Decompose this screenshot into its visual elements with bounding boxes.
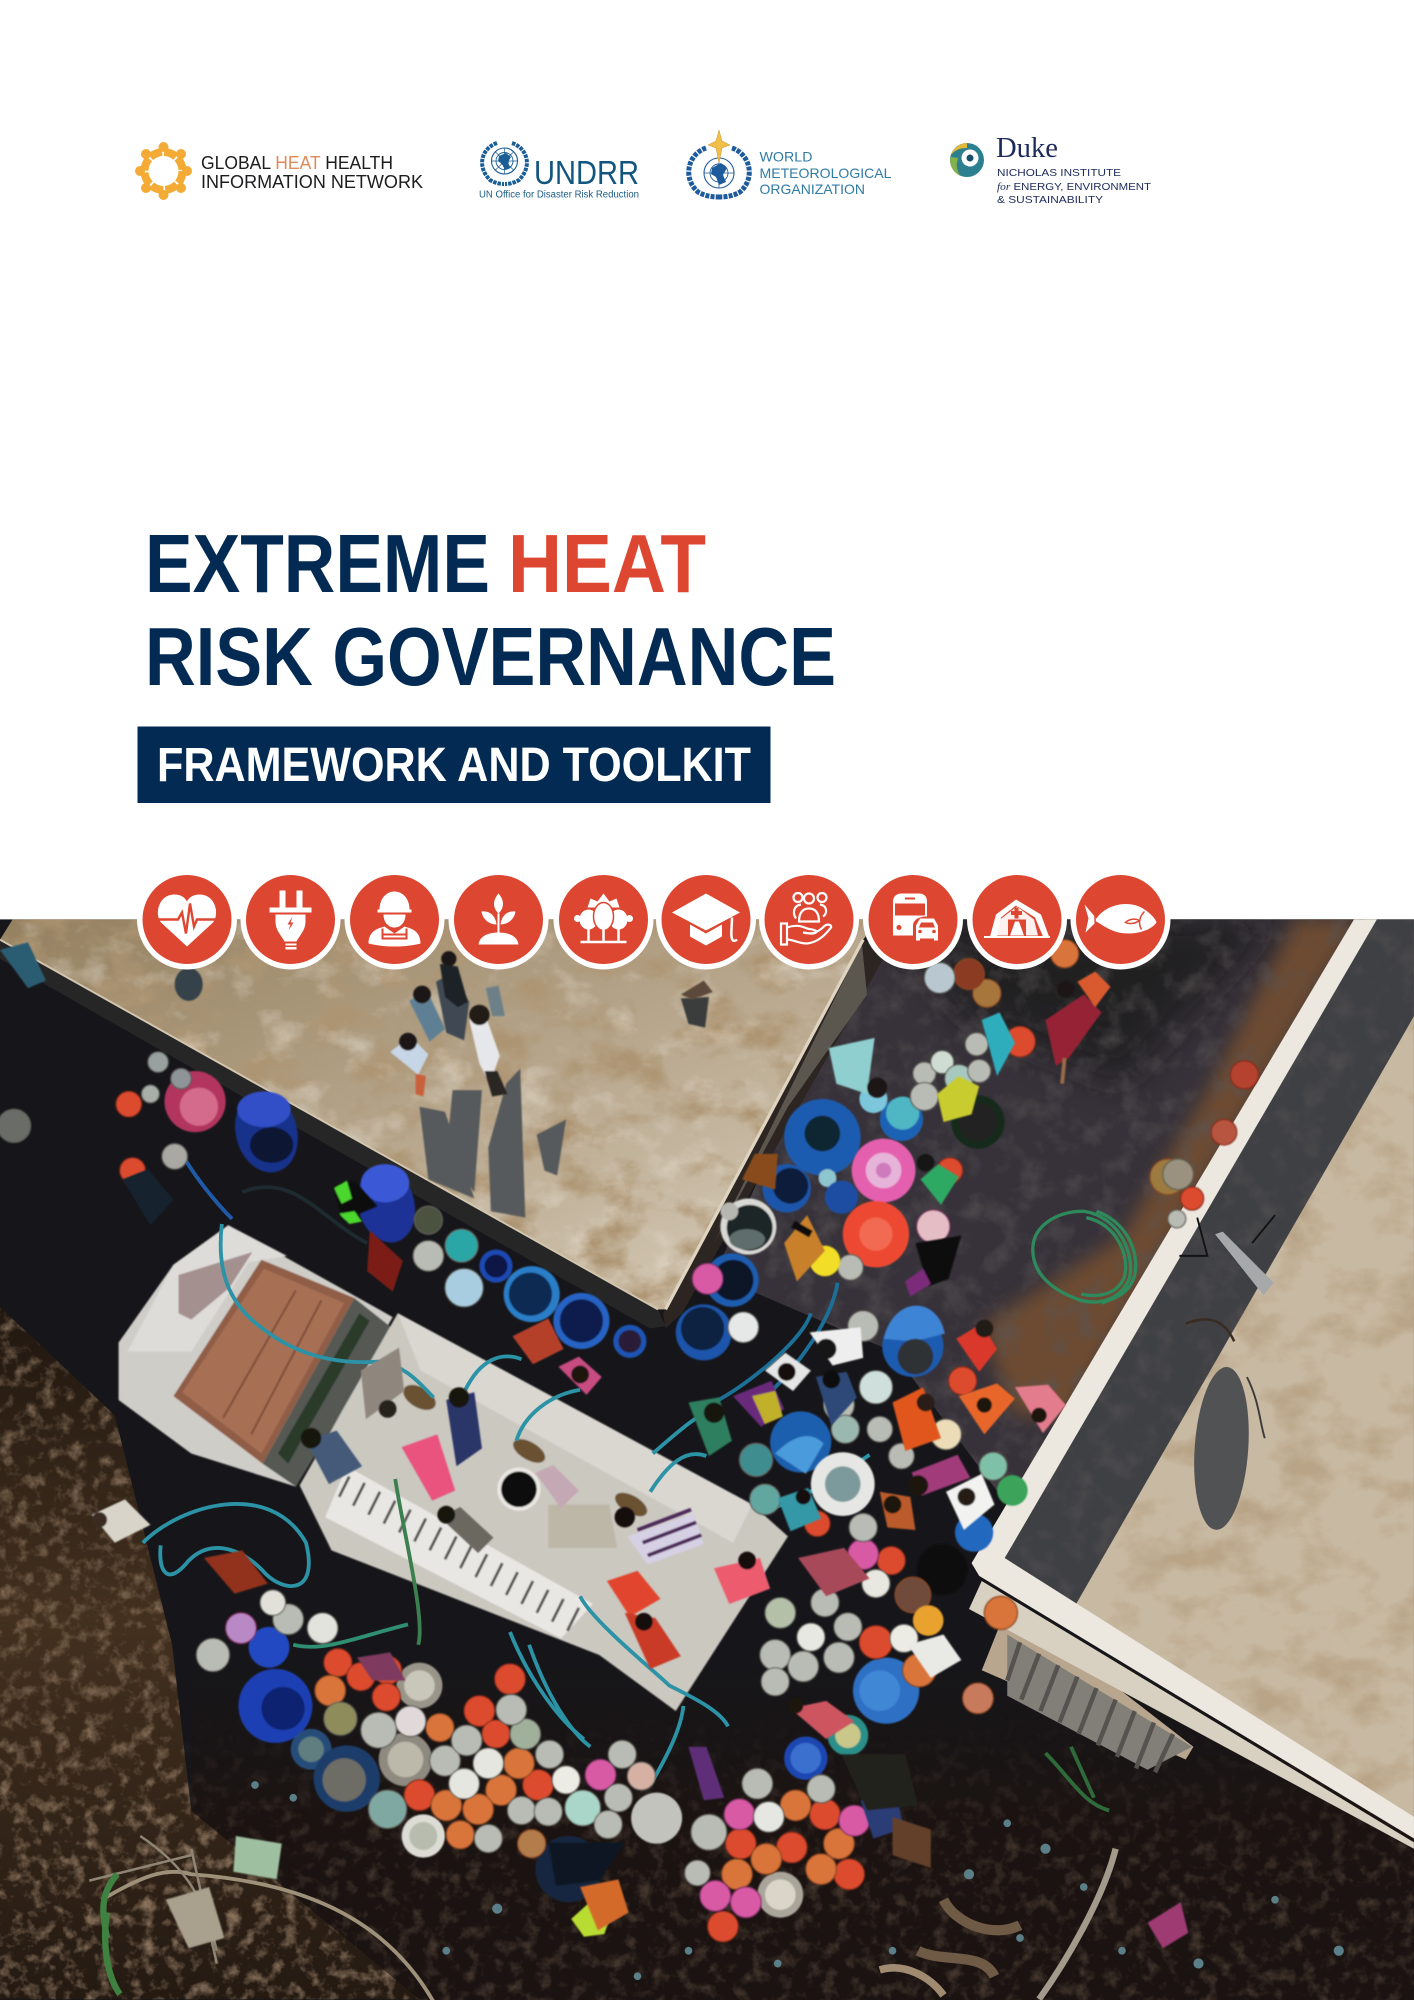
icon: plant sprout	[448, 870, 548, 970]
large coloured basins	[164, 1071, 1005, 1918]
blue barrels and tubs	[226, 1085, 993, 1902]
red and orange pots	[116, 1026, 1258, 1942]
icon: energy plug	[240, 870, 340, 970]
subtitle banner: FRAMEWORK AND TOOLKIT	[157, 738, 751, 792]
logo: World Meteorological Organization	[689, 130, 892, 197]
logo: World Meteorological Organization: METEOROLOGICAL	[760, 165, 892, 181]
logo: Duke Nicholas Institute: for ENERGY, ENVIRONMENT	[997, 181, 1152, 193]
logo: UNDRR: UN Office for Disaster Risk Reduction	[479, 190, 639, 200]
icon: medical tent	[967, 870, 1067, 970]
yellow and green containers	[571, 1076, 1028, 1937]
logo: Duke Nicholas Institute: NICHOLAS INSTITUTE	[997, 167, 1121, 179]
title	[145, 517, 836, 703]
children on roof	[390, 951, 713, 1096]
hoses	[143, 1148, 870, 1785]
left roof	[0, 919, 886, 1329]
crowd of people	[0, 942, 1111, 1930]
icon: community in a hand	[759, 870, 859, 970]
icon: forest trees	[554, 870, 654, 970]
logo row	[135, 130, 1152, 206]
icon: fish	[1070, 870, 1170, 970]
water tanker truck	[119, 1225, 788, 1711]
title: HEAT	[508, 517, 706, 610]
logo: Global Heat Health Information Network: GLOBAL HEAT HEALTH	[201, 153, 393, 173]
logo: Global Heat Health Information Network: INFORMATION NETWORK	[201, 172, 423, 192]
grey and white metal pots	[0, 963, 1193, 1886]
logo: Duke Nicholas Institute	[950, 132, 1152, 206]
logo: Duke Nicholas Institute: Duke	[996, 132, 1058, 164]
shadows of roof children	[175, 968, 709, 1218]
title: RISK GOVERNANCE	[145, 610, 836, 703]
cover photo: water tanker crowd from above	[0, 919, 1414, 2000]
logo: UNDRR: UNDRR	[534, 154, 639, 191]
pink pots	[226, 1210, 950, 1918]
icon: bus and car	[863, 870, 963, 970]
hose coil	[1033, 1211, 1136, 1303]
right building	[969, 919, 1414, 1849]
logo: World Meteorological Organization: WORLD	[760, 148, 812, 164]
icon: worker with helmet	[344, 870, 444, 970]
sector icon row	[137, 870, 1170, 970]
logo: Duke Nicholas Institute: & SUSTAINABILITY	[997, 194, 1103, 206]
icon: health heart	[137, 870, 237, 970]
subtitle banner	[138, 726, 770, 803]
logo: Global Heat Health Information Network	[135, 142, 423, 200]
logo: World Meteorological Organization: ORGANIZATION	[760, 181, 865, 197]
rubbish and dry branches	[89, 1747, 1116, 2000]
logo: UNDRR	[479, 143, 639, 200]
icon: graduation cap	[656, 870, 756, 970]
ground	[0, 919, 1414, 2000]
title: EXTREME	[145, 517, 490, 610]
